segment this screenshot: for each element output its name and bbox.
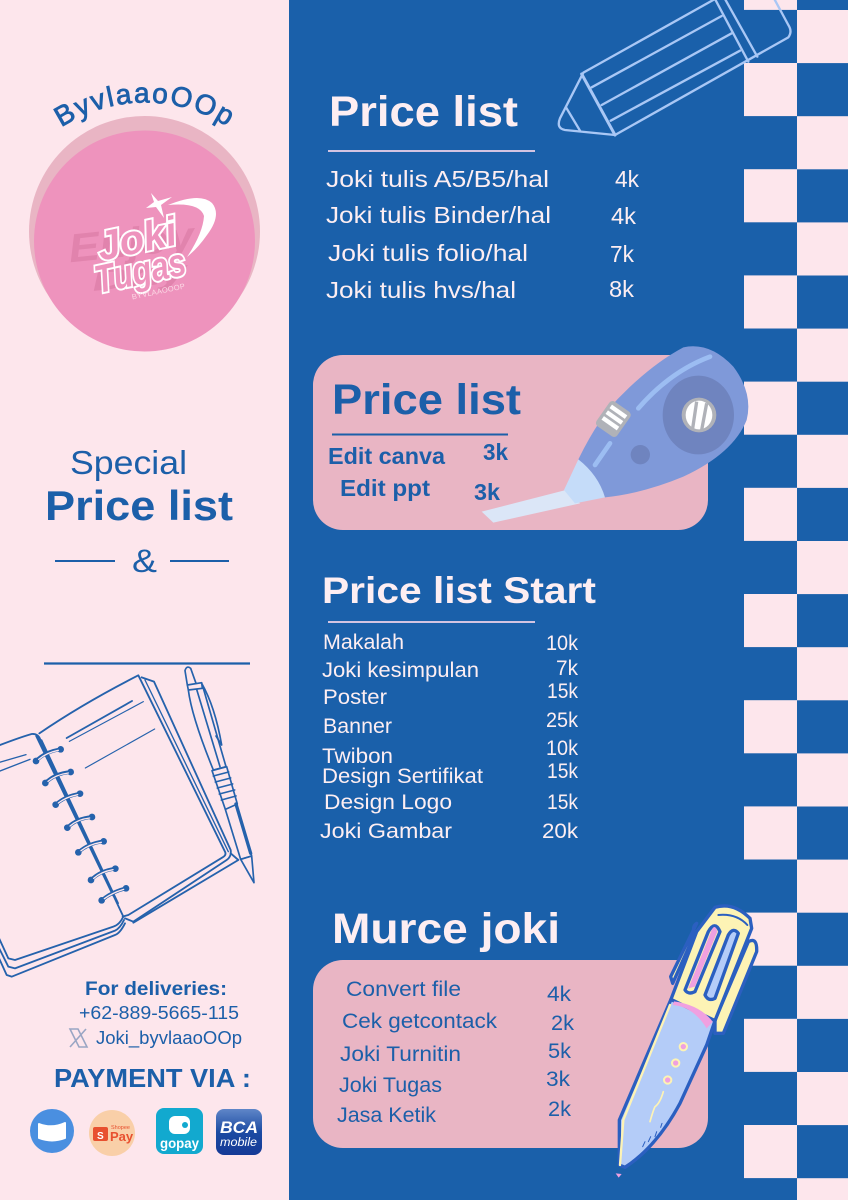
price rows: 7k — [610, 241, 634, 267]
icon: shopee pay: Pay — [110, 1129, 134, 1144]
heading: special price list: Special — [70, 444, 187, 481]
logo wordmark — [66, 193, 216, 302]
rows: 4k — [547, 983, 572, 1006]
rows: 5k — [548, 1040, 572, 1063]
rows: Cek getcontack — [342, 1010, 498, 1033]
rows: Joki Turnitin — [340, 1043, 461, 1066]
price rows — [320, 631, 579, 843]
checkerboard border — [744, 0, 848, 1200]
logo wordmark: Enjoy — [66, 214, 198, 271]
rows: Edit ppt — [340, 475, 430, 501]
price rows: 10k — [546, 737, 578, 760]
price rows: 8k — [609, 276, 635, 302]
icon: shopee pay — [89, 1110, 135, 1156]
rows: 3k — [546, 1068, 571, 1091]
price rows: Design Sertifikat — [322, 765, 483, 788]
panel: murce joki list — [313, 960, 708, 1148]
price rows: Joki kesimpulan — [322, 659, 479, 682]
icon: shopee pay: S — [97, 1131, 104, 1142]
contact block: +62-889-5665-115 — [79, 1003, 239, 1023]
price rows: 15k — [547, 680, 578, 703]
icon: open notebook and pen — [0, 667, 254, 977]
rows: Edit canva — [328, 443, 445, 469]
price rows: Poster — [323, 686, 387, 709]
panel: right blue main area — [289, 0, 848, 1200]
price rows: Joki Gambar — [320, 820, 452, 843]
price rows: 4k — [615, 166, 639, 192]
rows: Jasa Ketik — [337, 1104, 436, 1127]
icon: shopee pay: Shopee — [111, 1125, 130, 1131]
icon: gopay: gopay — [160, 1136, 199, 1151]
heading: Price list — [329, 88, 518, 136]
icon: bca mobile: mobile — [220, 1135, 257, 1149]
price rows: Joki tulis folio/hal — [328, 240, 528, 266]
price rows: 7k — [556, 657, 578, 680]
rows: 3k — [474, 479, 500, 505]
logo wordmark: Joki — [93, 208, 182, 270]
price rows: Twibon — [322, 745, 393, 768]
price rows: 25k — [546, 709, 578, 732]
icon: multicolor pen — [616, 906, 757, 1178]
icon: correction tape — [482, 346, 748, 523]
logo wordmark: Tugas — [91, 241, 190, 302]
price rows: Joki tulis hvs/hal — [326, 277, 516, 303]
logo wordmark: BYVLAAOOOP — [131, 281, 186, 301]
rows — [337, 978, 575, 1127]
section: price list tulis — [326, 88, 639, 303]
price rows: 20k — [542, 820, 579, 843]
price rows — [326, 166, 639, 303]
brand name curved heading: ByvlaaoOOp — [53, 86, 232, 126]
rows — [328, 439, 508, 505]
icon: dana — [30, 1109, 74, 1153]
price rows: Banner — [323, 715, 392, 738]
payment icons — [30, 1108, 262, 1156]
contact block: For deliveries: — [85, 979, 227, 1000]
price rows: Makalah — [323, 631, 404, 654]
heading: payment via: PAYMENT VIA : — [54, 1063, 251, 1093]
rows: 3k — [483, 439, 508, 465]
icon: outline pencil — [559, 0, 790, 135]
contact block: Joki_byvlaaoOOp — [96, 1028, 242, 1049]
rows: 2k — [548, 1098, 572, 1121]
icon: bca mobile: BCA — [220, 1118, 258, 1137]
rows: Convert file — [346, 978, 461, 1001]
heading: special price list — [45, 444, 233, 529]
logo circle — [29, 116, 260, 352]
price rows: Joki tulis Binder/hal — [326, 202, 551, 228]
rows: Joki Tugas — [339, 1074, 442, 1097]
ampersand divider: & — [132, 543, 157, 579]
heading: Price list — [332, 376, 521, 424]
price rows: Joki tulis A5/B5/hal — [326, 166, 549, 192]
panel: left pink sidebar — [0, 0, 289, 1200]
icon: bca mobile — [216, 1109, 262, 1155]
contact block — [70, 979, 242, 1049]
icon: gopay — [156, 1108, 203, 1154]
price rows: 15k — [547, 760, 578, 783]
logo wordmark: Day — [90, 255, 190, 298]
icon: X logo — [70, 1029, 87, 1047]
heading: murce joki: Murce joki — [332, 905, 560, 953]
price rows: 4k — [611, 203, 637, 229]
pen — [185, 667, 254, 883]
price rows: Design Logo — [324, 791, 452, 814]
price rows: 15k — [547, 791, 578, 814]
heading: Price list Start — [322, 570, 596, 611]
price rows: 10k — [546, 632, 578, 655]
panel: edit price list — [313, 355, 708, 530]
heading: special price list: Price list — [45, 482, 233, 529]
section: price list start — [320, 570, 596, 843]
rows: 2k — [551, 1012, 575, 1035]
